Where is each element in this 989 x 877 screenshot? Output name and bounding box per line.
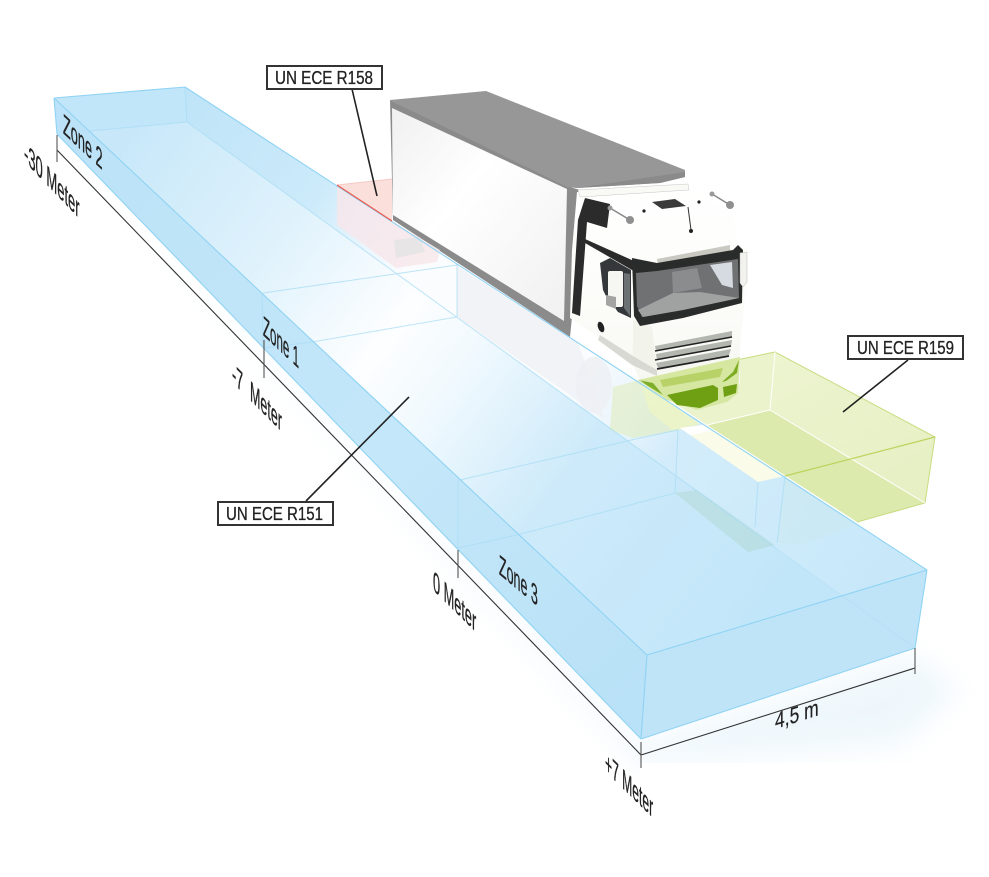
left side wall bbox=[54, 98, 647, 739]
label: Zone 1: Zone 1 bbox=[263, 309, 299, 375]
panel: R159 green front zone bbox=[640, 352, 935, 522]
zone 3 green through bbox=[777, 477, 857, 545]
truck reflection bbox=[457, 266, 605, 420]
mirror bbox=[600, 258, 631, 318]
callout: UN ECE R159 bbox=[843, 336, 963, 412]
label: 4,5 m: 4,5 m bbox=[775, 695, 819, 735]
seat bbox=[672, 268, 702, 293]
label: Zone 2: Zone 2 bbox=[63, 109, 103, 177]
windshield frame bbox=[632, 245, 743, 326]
trailer roof bbox=[390, 91, 685, 188]
grille bbox=[655, 331, 732, 369]
antennas and sun hatch bbox=[608, 192, 734, 233]
fog light recess bbox=[667, 385, 718, 408]
bumper green tint bbox=[638, 357, 740, 410]
zone divider lines bbox=[90, 87, 915, 648]
green reflection bbox=[610, 380, 700, 438]
floor shadow bbox=[675, 490, 775, 552]
callout: UN ECE R158 bbox=[267, 66, 382, 196]
side bar bbox=[585, 239, 640, 274]
panel: R158 red rear zone bbox=[337, 179, 392, 221]
label: -30 Meter: -30 Meter bbox=[24, 136, 80, 226]
front wall bbox=[641, 570, 927, 739]
box edges bbox=[54, 87, 927, 739]
callout: UN ECE R158: UN ECE R158 bbox=[275, 68, 373, 88]
callout: UN ECE R159: UN ECE R159 bbox=[857, 338, 954, 358]
pink reflection bbox=[337, 185, 440, 268]
lower cab trim bbox=[598, 335, 657, 376]
red edge line bbox=[337, 185, 392, 221]
ghost wheel bbox=[576, 357, 612, 413]
label: Zone 3: Zone 3 bbox=[499, 548, 538, 613]
panel: R151 blue zone bbox=[54, 87, 927, 739]
callout: UN ECE R151: UN ECE R151 bbox=[226, 504, 323, 524]
right mirror bbox=[740, 252, 747, 287]
callout: UN ECE R151 bbox=[218, 397, 409, 525]
cab body bbox=[570, 187, 747, 410]
end wall bbox=[54, 87, 187, 131]
dashboard bbox=[638, 292, 739, 317]
dimension lines bbox=[57, 135, 915, 768]
label: +7 Meter: +7 Meter bbox=[605, 745, 653, 824]
label: -7 Meter: -7 Meter bbox=[232, 357, 282, 439]
windshield glass bbox=[636, 259, 739, 317]
white wedge bbox=[680, 425, 785, 482]
roof band above windshield bbox=[657, 245, 730, 265]
back wall bbox=[185, 87, 927, 648]
black pillar and side cap bbox=[572, 198, 610, 316]
trailer side panel bbox=[392, 108, 567, 321]
right side window bbox=[710, 262, 733, 288]
door handle bbox=[596, 321, 606, 333]
trailer frame bbox=[390, 100, 580, 337]
floor bbox=[57, 122, 915, 739]
label: 0 Meter: 0 Meter bbox=[433, 565, 476, 640]
ground glow under blue zone bbox=[60, 140, 960, 765]
truck bbox=[390, 91, 747, 410]
